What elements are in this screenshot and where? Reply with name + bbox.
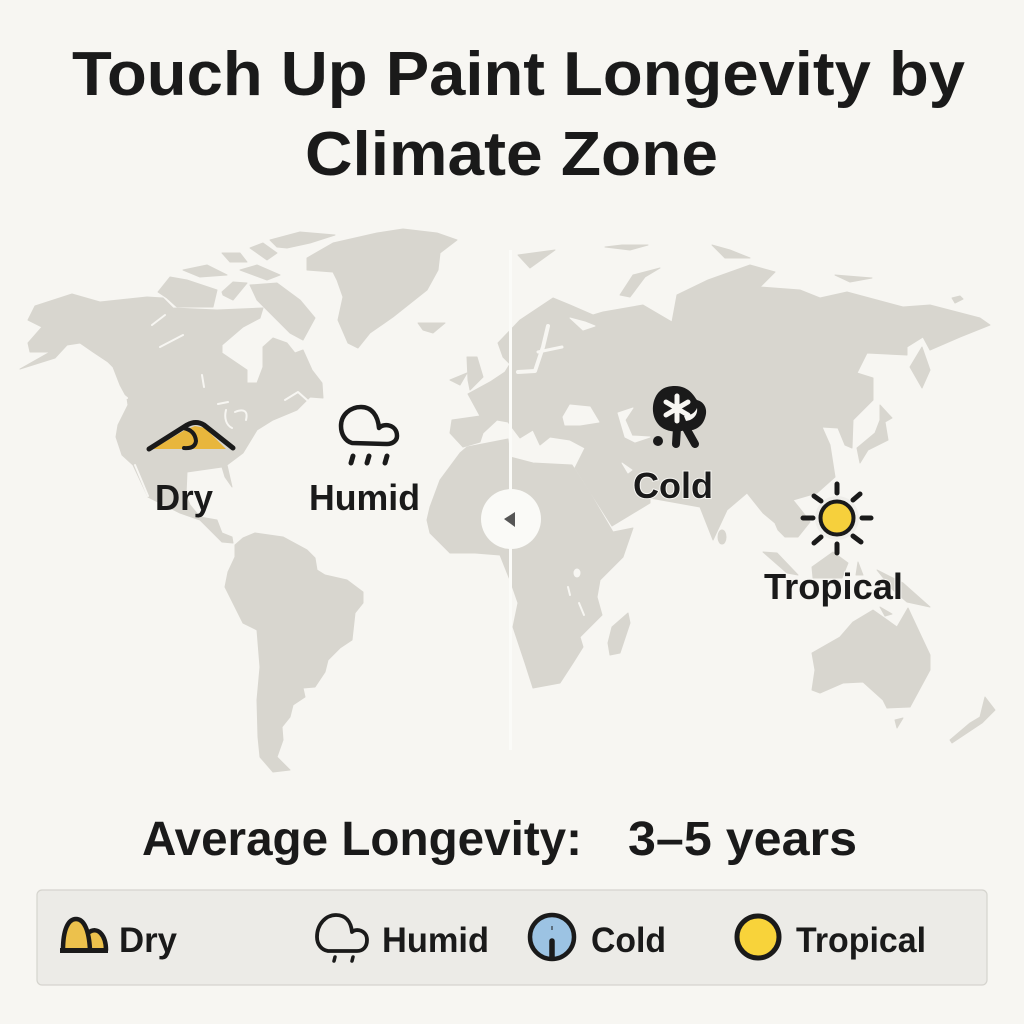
icon: sun [803,484,871,553]
map: Greenland [307,229,457,348]
map: Arctic islands [158,232,335,340]
map: Tasmania and New Zealand [895,697,995,743]
marker: Dry: Dry [155,477,213,518]
marker: Humid: Humid [309,477,420,518]
map: African lakes [568,569,584,615]
marker: Tropical: Tropical [764,566,903,607]
marker: Humid [309,407,420,518]
map: Great Lakes and inlets [107,315,307,496]
map: inland seas [518,318,650,473]
legend item: Tropical: Tropical [796,921,926,960]
legend item: Cold: Cold [591,921,666,960]
title: Climate Zone [305,120,718,189]
marker: Cold [633,386,713,506]
map: Japan and Sakhalin [857,347,930,463]
average longevity headline: 3–5 years [628,813,857,866]
map: Africa [427,439,633,688]
average longevity headline [142,813,857,866]
map: Eurasia [450,265,990,540]
marker: Dry [149,422,233,518]
legend item: Dry [60,919,178,960]
icon: rain cloud [341,407,397,463]
map: Australia [812,608,930,708]
legend panel [37,890,987,985]
map: British Isles [450,357,483,390]
slider divider line [509,250,512,750]
slider handle [481,489,541,549]
map: Arctic Eurasia islands [518,245,963,303]
title [72,40,966,189]
legend item: Humid [317,915,489,961]
map: Iceland [418,323,445,333]
legend item: Humid: Humid [382,921,489,960]
marker: Tropical [764,484,903,607]
map: Southeast Asia islands [718,530,930,616]
world map [20,229,995,772]
marker: Cold: Cold [633,465,713,506]
icon: snow blob [653,386,706,446]
average longevity headline: Average Longevity: [142,813,582,866]
map: Madagascar [608,613,630,655]
legend item: Tropical [737,916,926,960]
map: South America [225,533,363,772]
title: Touch Up Paint Longevity by [72,40,966,109]
legend item: Cold [530,915,666,960]
map: North America [20,294,323,543]
icon: dune [149,422,233,449]
legend item: Dry: Dry [119,921,178,960]
